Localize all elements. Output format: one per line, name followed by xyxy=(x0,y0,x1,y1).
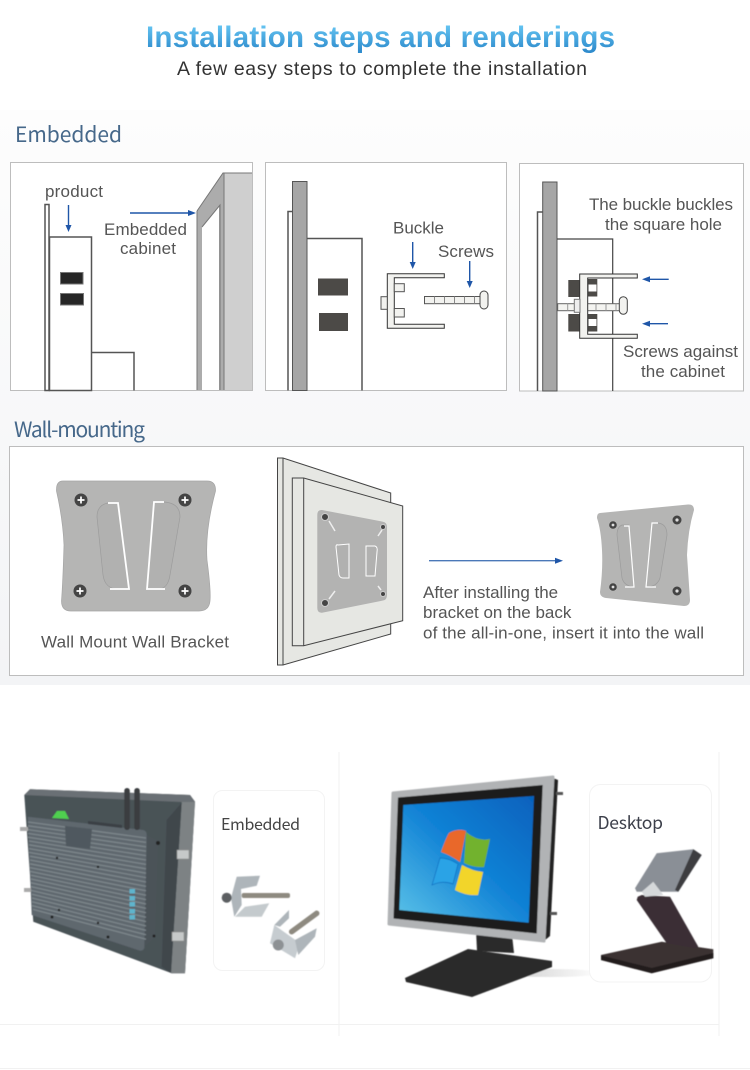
label: installing instructions xyxy=(423,583,704,642)
arrow: buckle xyxy=(410,242,416,269)
arrow: screws xyxy=(467,261,473,288)
monitor rear with bracket xyxy=(278,458,403,665)
panel: embedded step 3 xyxy=(520,164,744,391)
label: embedded: Embedded xyxy=(221,811,300,835)
label: installing instructions: After installing the xyxy=(423,583,558,602)
label: screws against cabinet xyxy=(623,342,738,381)
panel: embedded step 1 xyxy=(10,162,252,390)
label: installing instructions: of the all-in-one, insert it into the wall xyxy=(423,624,704,642)
wall bracket xyxy=(56,481,216,611)
label: buckle buckles square hole: The buckle buckles xyxy=(589,195,733,214)
product drawing xyxy=(45,204,134,390)
subtitle: A few easy steps to complete the installation xyxy=(177,58,587,80)
label: buckle buckles square hole xyxy=(589,195,733,234)
photo: desktop monitor xyxy=(389,777,600,997)
label: screws against cabinet: the cabinet xyxy=(641,362,725,381)
cabinet drawing xyxy=(197,173,252,390)
photo: mounting clips xyxy=(222,876,317,958)
product side drawing xyxy=(288,182,362,390)
heading: Embedded: Embedded xyxy=(15,119,122,149)
label: buckle buckles square hole: the square hole xyxy=(605,215,722,234)
arrow: lower screw xyxy=(642,321,668,327)
label: installing instructions: bracket on the back xyxy=(423,603,572,622)
arrow: product xyxy=(66,205,72,232)
buckle drawing xyxy=(381,274,444,328)
label: embedded cabinet: Embedded xyxy=(104,220,187,239)
arrow: install direction xyxy=(429,558,563,564)
label: screws against cabinet: Screws against xyxy=(623,342,738,361)
label: embedded cabinet: cabinet xyxy=(120,239,176,258)
label: buckle: Buckle xyxy=(393,218,444,238)
angled wall bracket xyxy=(597,504,694,606)
photo: desktop stand xyxy=(601,849,713,973)
panel: wall-mounting xyxy=(10,446,744,676)
installed assembly drawing xyxy=(538,182,637,391)
heading: Wall-mounting: Wall-mounting xyxy=(14,414,145,444)
label: wall mount wall bracket: Wall Mount Wall Bracket xyxy=(41,632,229,652)
label: embedded cabinet xyxy=(104,220,187,258)
screw drawing xyxy=(424,291,488,309)
label: product: product xyxy=(45,182,103,201)
label: screws: Screws xyxy=(438,242,494,261)
label: desktop: Desktop xyxy=(598,810,663,835)
arrow: upper screw xyxy=(642,276,669,282)
arrow: cabinet xyxy=(130,210,196,216)
title: Installation steps and renderings xyxy=(146,21,615,54)
panel: embedded step 2 xyxy=(266,162,506,390)
card: embedded hardware xyxy=(214,790,324,970)
photo: embedded monitor rear xyxy=(20,788,195,973)
card: desktop stand xyxy=(590,784,713,982)
